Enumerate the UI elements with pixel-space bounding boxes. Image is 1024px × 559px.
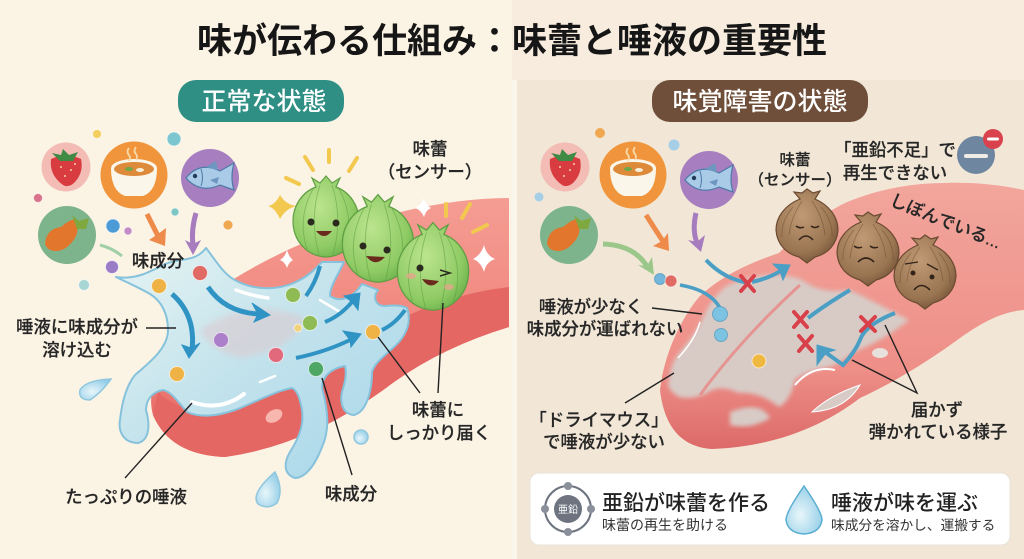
text: zinc makes buds: 味蕾の再生を助ける (602, 517, 728, 533)
taste bud: withered 1 (776, 189, 838, 263)
label: dry mouth: 「ドライマウス」 (529, 410, 669, 430)
label: repelled (852, 325, 1007, 442)
label: zinc deficiency: 再生できない (843, 163, 947, 183)
label: little saliva (527, 297, 702, 339)
heading: normal state: 正常な状態 (201, 88, 327, 116)
label: shriveled: しぼんでいる... (887, 190, 1004, 253)
text: saliva carries taste: 唾液が味を運ぶ (831, 492, 978, 515)
label: taste component top: 味成分 (132, 251, 185, 271)
food arrows (603, 213, 705, 275)
label: dry mouth (529, 373, 674, 452)
label: reach buds (378, 303, 491, 443)
droplets (80, 379, 368, 507)
label: plenty of saliva (65, 403, 192, 507)
taste bud: green 2 (342, 195, 414, 282)
callout panel (530, 473, 1010, 545)
label: dissolve: 唾液に味成分が (16, 317, 138, 337)
heading: normal state (178, 80, 344, 122)
label: dry mouth: で唾液が少ない (543, 432, 665, 452)
panel: impaired state (527, 80, 1024, 545)
label: zinc deficiency (834, 140, 956, 183)
label: taste bud sensor: （センサー） (748, 172, 842, 189)
label: repelled: 届かず (911, 400, 963, 420)
red crosses (741, 276, 875, 351)
heading: impaired state: 味覚障害の状態 (672, 88, 848, 116)
label: dissolve (16, 317, 176, 360)
label: dissolve: 溶け込む (42, 340, 112, 360)
label: taste bud sensor: 味蕾 (779, 151, 811, 169)
label: taste component bottom (322, 378, 378, 504)
saliva (116, 248, 409, 478)
blue blocked arrows (680, 260, 895, 365)
sparkle rays (268, 150, 495, 272)
taste bud: withered 3 (894, 235, 956, 309)
label: taste bud sensor: 味蕾 (413, 139, 447, 159)
heading: impaired state (652, 80, 868, 122)
label: reach buds: 味蕾に (412, 400, 464, 420)
flavor arrows from food (100, 213, 201, 256)
food icons (38, 142, 239, 264)
icon: zinc atom (541, 482, 595, 536)
label: plenty of saliva: たっぷりの唾液 (65, 487, 187, 507)
icon: zinc atom: 亜鉛 (558, 504, 578, 516)
text: saliva carries taste: 味成分を溶かし、運搬する (831, 518, 995, 533)
flavor particles (34, 130, 380, 382)
label: taste bud sensor (378, 139, 482, 182)
food icons (534, 128, 738, 264)
panel: normal state (16, 80, 509, 507)
title: 味が伝わる仕組み：味蕾と唾液の重要性 (197, 22, 827, 61)
label: little saliva: 唾液が少なく (539, 297, 643, 317)
label: little saliva: 味成分が運ばれない (527, 319, 683, 339)
label: zinc deficiency: 「亜鉛不足」で (834, 140, 956, 160)
dry saliva patches (668, 275, 909, 426)
label: taste component bottom: 味成分 (325, 484, 378, 504)
label: repelled: 弾かれている様子 (869, 422, 1007, 442)
particles (654, 274, 766, 368)
taste bud: green 3 (397, 223, 469, 310)
tongue (151, 198, 509, 457)
icon: saliva drop (786, 486, 822, 534)
blue arrows (172, 266, 405, 358)
zinc minus icon (957, 129, 1003, 174)
label: reach buds: しっかり届く (387, 423, 491, 443)
taste bud: withered 2 (837, 212, 899, 286)
text: saliva carries taste (831, 492, 995, 533)
taste bud: green 1 (293, 176, 359, 257)
label: taste bud sensor: （センサー） (378, 162, 482, 182)
text: zinc makes buds: 亜鉛が味蕾を作る (602, 492, 770, 515)
tongue (660, 183, 1024, 449)
label: taste bud sensor (748, 151, 842, 189)
text: zinc makes buds (602, 492, 770, 533)
